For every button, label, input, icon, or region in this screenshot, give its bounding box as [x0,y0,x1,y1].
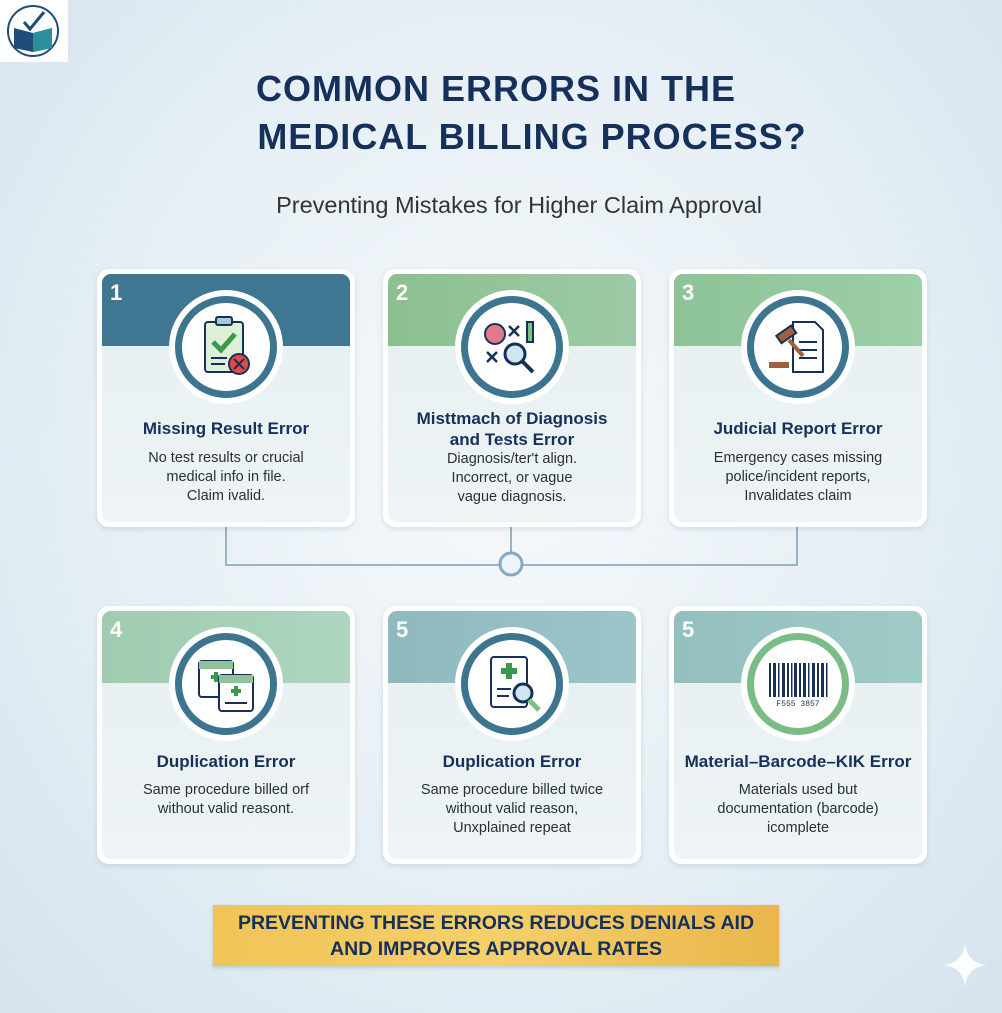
card 5 [383,606,641,864]
icon: sparkle [944,944,986,986]
card 3: Judicial Report Error [713,419,883,438]
card 5: without valid reason, [446,801,578,817]
card 5: Same procedure billed twice [421,782,603,798]
card 6: documentation (barcode) [717,801,879,817]
card 4: 4 [110,617,122,642]
icon: brain and magnifier [455,290,569,404]
icon: clipboard [169,290,283,404]
card 4: Same procedure billed orf [143,782,309,798]
bottom banner: AND IMPROVES APPROVAL RATES [330,938,662,960]
icon: document with magnifier [455,627,569,741]
card 6 [669,606,927,864]
card 5: 5 [396,617,408,642]
card 3 [669,269,927,527]
bottom banner: PREVENTING THESE ERRORS REDUCES DENIALS AID [238,912,754,934]
card 1: medical info in file. [166,469,286,485]
card 2: 2 [396,280,408,305]
card 5: Duplication Error [443,752,581,771]
title [256,68,807,157]
card 1: Missing Result Error [143,419,309,438]
subtitle: Preventing Mistakes for Higher Claim Approval [276,192,762,218]
card 4: without valid reasont. [158,801,294,817]
icon: duplicate documents [169,627,283,741]
card 2: Incorrect, or vague [452,470,572,486]
icon: gavel and document [741,290,855,404]
card 1: 1 [110,280,122,305]
logo [0,0,68,62]
card 4: Duplication Error [157,752,295,771]
card 2: vague diagnosis. [458,489,566,505]
card 6: 5 [682,617,694,642]
card 4 [97,606,355,864]
card 3: police/incident reports, [725,469,871,485]
card 6: Material–Barcode–KIK Error [685,752,911,771]
icon: barcode [741,627,855,741]
card 2 [383,269,641,527]
card 2: and Tests Error [450,430,574,449]
card 3: Emergency cases missing [714,450,882,466]
card 6: icomplete [767,820,829,836]
card 6: Materials used but [739,782,857,798]
icon: barcode: F555 3857 [776,700,820,709]
card 3: 3 [682,280,694,305]
card 1 [97,269,355,527]
card 1: No test results or crucial [148,450,304,466]
card 3: Invalidates claim [744,488,852,504]
card 1: Claim ivalid. [187,488,265,504]
title: COMMON ERRORS IN THE [256,68,736,109]
card 5: Unxplained repeat [453,820,571,836]
card 2: Diagnosis/ter't align. [447,451,577,467]
title: MEDICAL BILLING PROCESS? [257,116,807,157]
bottom banner [213,905,779,966]
card 2: Misttmach of Diagnosis [417,409,607,428]
